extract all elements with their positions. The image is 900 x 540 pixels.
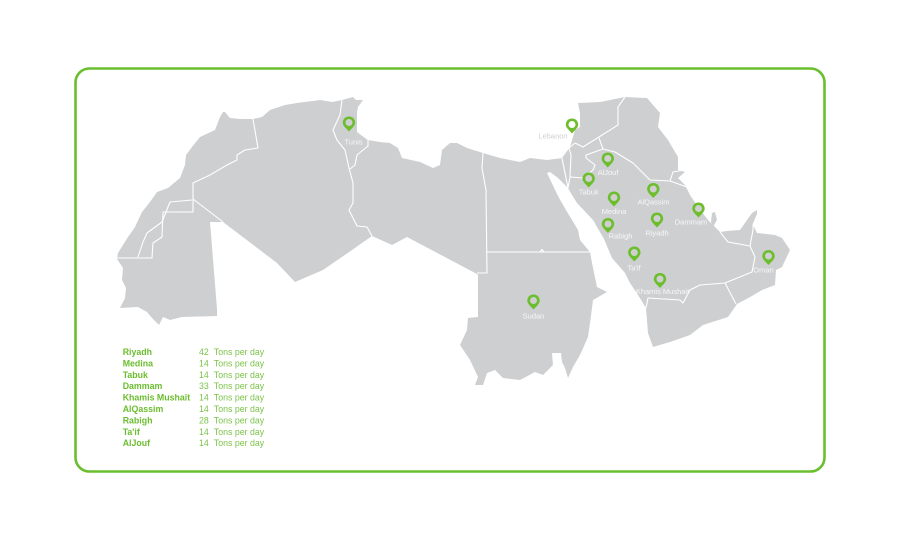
map: North Africa and Arabian Peninsula bbox=[117, 97, 790, 385]
country borders bbox=[117, 97, 757, 308]
legend: tons per day by city: 14 bbox=[199, 393, 209, 403]
marker: Riyadh bbox=[645, 212, 669, 238]
marker: Riyadh: Riyadh bbox=[645, 228, 669, 238]
marker: Oman: Oman bbox=[753, 266, 774, 274]
region: Levant, Iraq and Arabian Peninsula bbox=[562, 97, 790, 347]
legend: tons per day by city: Dammam bbox=[123, 381, 162, 391]
marker: Rabigh bbox=[602, 218, 632, 240]
legend: tons per day by city: Tons per day bbox=[214, 404, 265, 414]
legend: tons per day by city: Tons per day bbox=[214, 347, 265, 357]
legend: tons per day by city: 28 bbox=[199, 415, 209, 425]
legend: tons per day by city: Khamis Mushait bbox=[123, 393, 190, 403]
legend: tons per day by city: 14 bbox=[199, 404, 209, 414]
legend: tons per day by city: 14 bbox=[199, 358, 209, 368]
marker: Rabigh: Rabigh bbox=[609, 232, 632, 240]
legend: tons per day by city: 14 bbox=[199, 427, 209, 437]
legend: tons per day by city: Tons per day bbox=[214, 427, 265, 437]
legend: tons per day by city: Tons per day bbox=[214, 438, 265, 448]
legend: tons per day by city: Rabigh bbox=[123, 415, 153, 425]
legend: tons per day by city: Tons per day bbox=[214, 370, 265, 380]
legend: tons per day by city: 14 bbox=[199, 438, 209, 448]
legend: tons per day by city: AlQassim bbox=[123, 404, 163, 414]
marker: AlJouf: AlJouf bbox=[598, 168, 619, 177]
legend: tons per day by city: Riyadh bbox=[123, 347, 152, 357]
region: Maghreb, Libya, Egypt and Sudan bbox=[117, 97, 607, 385]
legend: tons per day by city: 33 bbox=[199, 381, 209, 391]
marker: Sudan bbox=[523, 294, 544, 320]
marker: Khamis Mushait: Khamis Mushait bbox=[636, 287, 690, 296]
marker: Tunis: Tunis bbox=[344, 138, 363, 146]
legend: tons per day by city: Tabuk bbox=[123, 370, 148, 380]
marker: Lebanon: Lebanon bbox=[538, 132, 568, 140]
marker: Ta'if: Ta'if bbox=[627, 264, 641, 272]
legend: tons per day by city bbox=[123, 347, 265, 448]
region: Qatar peninsula bbox=[711, 212, 717, 227]
marker: Medina bbox=[602, 192, 627, 216]
legend: tons per day by city: Ta'if bbox=[123, 427, 140, 437]
marker: Khamis Mushait bbox=[636, 273, 690, 296]
legend: tons per day by city: AlJouf bbox=[123, 438, 150, 448]
marker: Dammam: Dammam bbox=[675, 218, 707, 226]
legend: tons per day by city: Medina bbox=[123, 358, 153, 368]
marker: Lebanon bbox=[538, 118, 578, 140]
marker: Tabuk bbox=[579, 172, 599, 196]
marker: Tabuk: Tabuk bbox=[579, 188, 599, 196]
marker: AlJouf bbox=[598, 152, 619, 177]
legend: tons per day by city: 42 bbox=[199, 347, 209, 357]
marker: Sudan: Sudan bbox=[523, 312, 544, 320]
marker: AlQassim: AlQassim bbox=[637, 198, 670, 206]
legend: tons per day by city: Tons per day bbox=[214, 358, 265, 368]
frame: rounded green border bbox=[76, 68, 824, 472]
legend: tons per day by city: Tons per day bbox=[214, 393, 265, 403]
marker: Tunis bbox=[343, 116, 363, 146]
legend: tons per day by city: Tons per day bbox=[214, 381, 265, 391]
marker: Ta'if bbox=[627, 246, 641, 272]
marker: Dammam bbox=[675, 202, 707, 226]
legend: tons per day by city: Tons per day bbox=[214, 415, 265, 425]
marker: Medina: Medina bbox=[602, 207, 627, 216]
legend: tons per day by city: 14 bbox=[199, 370, 209, 380]
marker: AlQassim bbox=[637, 183, 670, 206]
marker: Oman bbox=[753, 250, 775, 274]
